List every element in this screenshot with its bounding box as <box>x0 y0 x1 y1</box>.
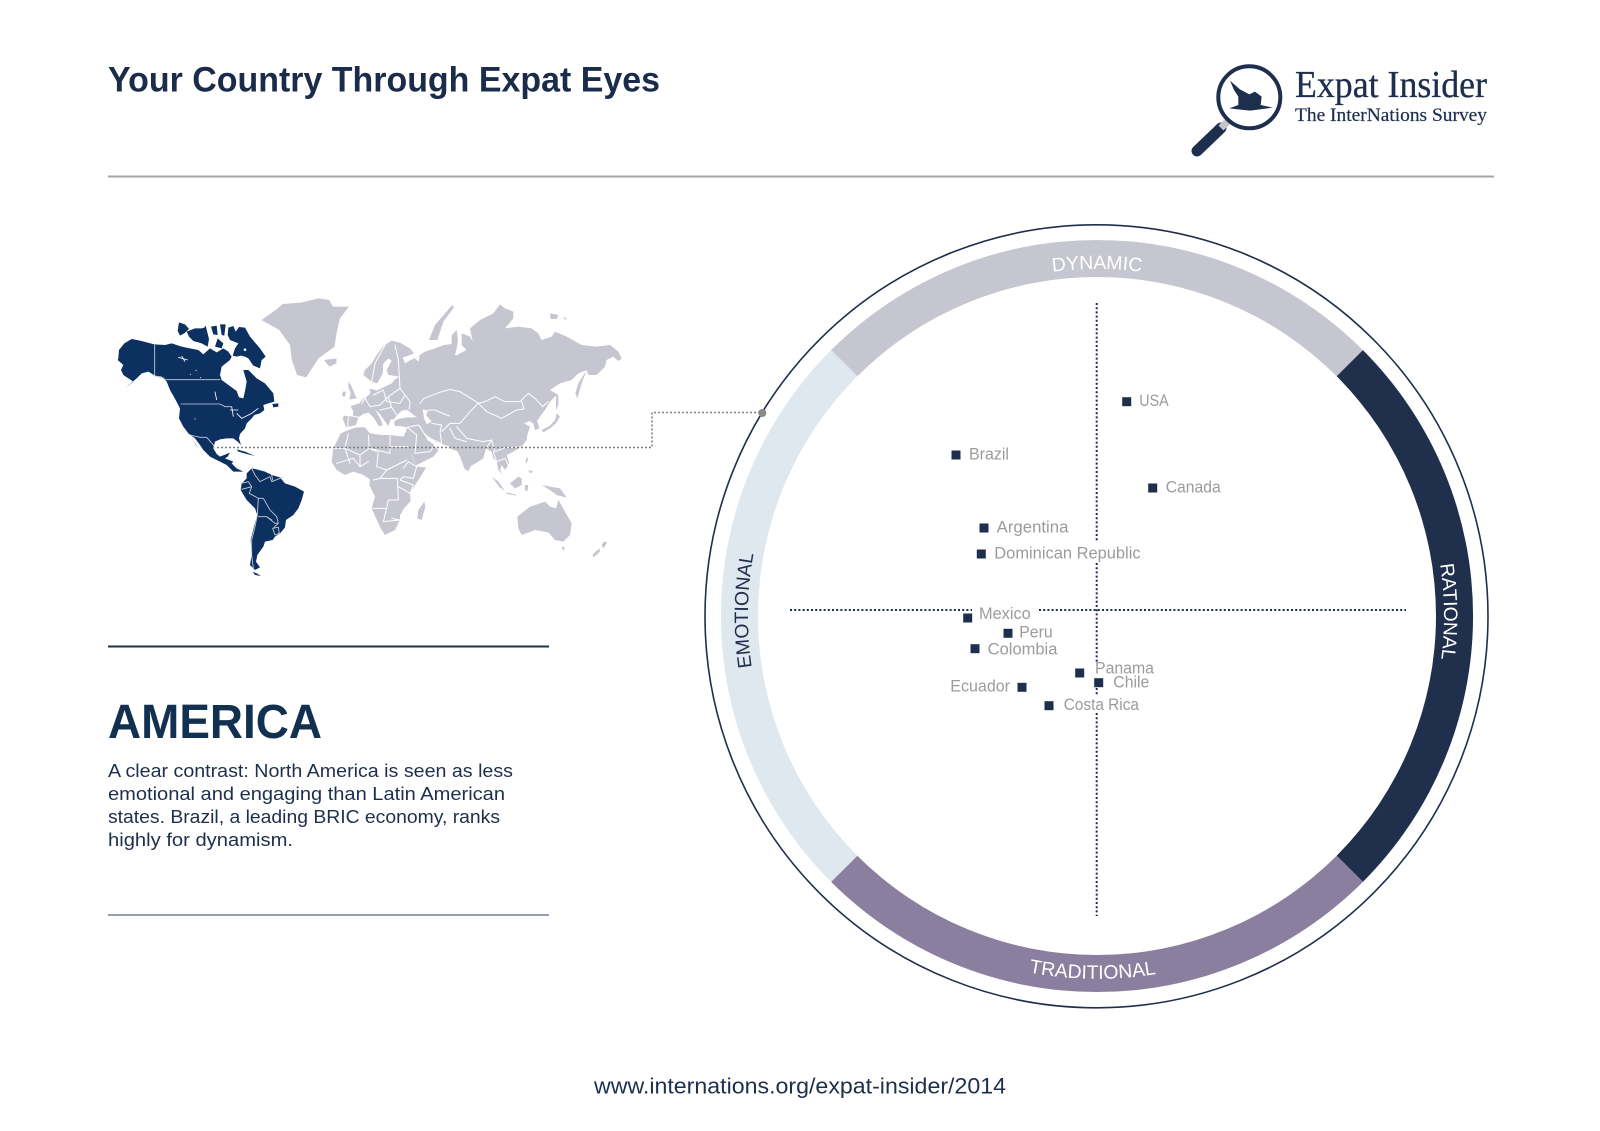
panel: America text <box>108 646 549 915</box>
map: Canadian Arctic islands <box>178 322 266 368</box>
data point: Chile <box>1094 674 1149 692</box>
map: Europe, Middle East and west Asia <box>342 305 490 472</box>
logo wordmark: Expat Insider <box>1295 64 1487 106</box>
map: North America highlighted <box>118 339 278 472</box>
segment label: emotional: EMOTIONAL <box>734 554 754 668</box>
data point: Canada: Canada <box>1166 479 1222 497</box>
connector line from map to chart <box>217 409 766 448</box>
data point: Peru <box>1004 624 1053 642</box>
chart: circular perception map <box>704 224 1489 1009</box>
data point: USA <box>1122 392 1169 410</box>
text block: description: highly for dynamism. <box>108 829 293 850</box>
data point: Ecuador: Ecuador <box>950 678 1011 696</box>
data point: Peru: Peru <box>1019 624 1053 642</box>
heading: America: AMERICA <box>108 696 322 749</box>
data point: Argentina: Argentina <box>997 519 1069 537</box>
data point: Dominican Republic: Dominican Republic <box>994 544 1141 562</box>
world map <box>118 298 622 576</box>
segment: dynamic <box>831 240 1363 376</box>
map: East Asia and Oceania <box>450 304 622 558</box>
segment: rational <box>1337 350 1473 882</box>
text block: description: emotional and engaging than Latin American <box>108 783 505 804</box>
data point: Mexico: Mexico <box>979 605 1031 623</box>
footer url: www.internations.org/expat-insider/2014 <box>593 1074 1006 1098</box>
data point: Panama: Panama <box>1095 659 1155 677</box>
data point: Brazil: Brazil <box>969 446 1009 464</box>
data point: Brazil <box>952 446 1009 464</box>
segment: traditional <box>831 856 1363 992</box>
logo tagline: The InterNations Survey <box>1295 106 1488 126</box>
segment label: rational: RATIONAL <box>1440 564 1458 659</box>
data point: Chile: Chile <box>1113 674 1149 692</box>
segment label: dynamic: DYNAMIC <box>1052 256 1142 272</box>
segment: emotional <box>721 350 857 882</box>
icon: magnifying glass with bird <box>1197 66 1280 151</box>
title: Your Country Through Expat Eyes <box>108 60 660 100</box>
axes: dotted cross <box>790 303 1406 916</box>
text block: description: states. Brazil, a leading BRIC economy, ranks <box>108 806 500 827</box>
data point: Colombia: Colombia <box>988 641 1058 659</box>
data point: USA: USA <box>1139 392 1169 410</box>
segment label: traditional: TRADITIONAL <box>1031 959 1156 979</box>
logo: Expat Insider <box>1197 64 1488 151</box>
map: South America highlighted <box>241 468 304 576</box>
data point: Costa Rica: Costa Rica <box>1064 696 1140 714</box>
map: Africa <box>332 427 426 535</box>
map: Greenland and Iceland <box>261 298 349 377</box>
text block: description: A clear contrast: North America is seen as less <box>108 760 513 781</box>
text block: description <box>108 760 513 850</box>
